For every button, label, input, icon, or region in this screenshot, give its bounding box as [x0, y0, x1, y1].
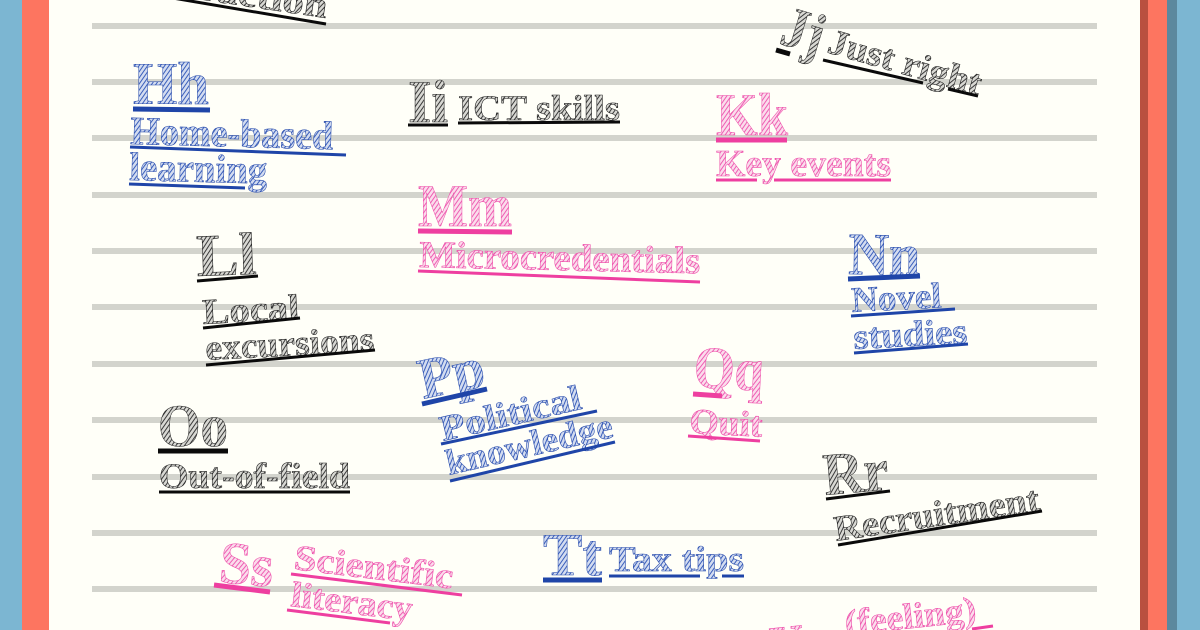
- ruled notebook lines: [92, 23, 1097, 592]
- entry: Kk Key events: [716, 82, 891, 185]
- entry: Nn Novel studies: Novel: [850, 275, 942, 320]
- entry: Ss Scientific literacy: Ss: [217, 529, 276, 600]
- entry: Rr Recruitment: Rr: [820, 437, 891, 508]
- entry: Oo Out-of-field: Out-of-field: [159, 456, 350, 496]
- entry: Oo Out-of-field: [158, 393, 350, 496]
- entry: Tt Tax tips: Tt: [543, 522, 602, 588]
- entry: Pp Political knowledge: Pp: [412, 334, 490, 412]
- entry: Kk Key events: Key events: [716, 143, 891, 185]
- entry: Hh Home-based learning: Home-based: [130, 108, 334, 158]
- entry: Ll Local excursions: [195, 221, 375, 368]
- entry: Hh Home-based learning: Hh: [133, 51, 209, 117]
- entry: Jj Just right: [774, 0, 987, 103]
- entry: Pp Political knowledge: knowledge: [442, 406, 616, 483]
- entry: Qq Quit: [688, 334, 766, 445]
- entry: Pp Political knowledge: [412, 334, 616, 483]
- entry: Rr Recruitment: Recruitment: [831, 479, 1042, 549]
- entry: Oo Out-of-field: Oo: [158, 393, 228, 459]
- entry: Mm Microcredentials: [418, 173, 701, 282]
- entry: Ii ICT skills: Ii: [408, 69, 448, 135]
- entry: Ll Local excursions: Ll: [195, 221, 257, 289]
- entry: cropped word at top: [176, 0, 326, 26]
- entry: Mm Microcredentials: Microcredentials: [419, 234, 701, 282]
- entry: Qq Quit: Qq: [692, 334, 766, 404]
- entry: Nn Novel studies: studies: [852, 311, 968, 357]
- entry: Ll Local excursions: excursions: [204, 319, 375, 368]
- entry: Hh Home-based learning: learning: [129, 144, 268, 193]
- entry: Ii ICT skills: [408, 69, 620, 135]
- entry: Pp Political knowledge: Political: [436, 377, 585, 449]
- entry: Uu (feeling) at bottom edge: [768, 597, 994, 630]
- entry: Jj Just right: Just right: [824, 21, 987, 103]
- entry: Tt Tax tips: Tax tips: [609, 539, 744, 579]
- entry: Ss Scientific literacy: literacy: [289, 574, 415, 629]
- entry: Mm Microcredentials: Mm: [418, 173, 512, 239]
- entry: Ii ICT skills: ICT skills: [458, 88, 620, 128]
- entry: Hh Home-based learning: [129, 51, 346, 193]
- entry: Ll Local excursions: Local: [201, 287, 300, 332]
- entry: Rr Recruitment: [820, 437, 1042, 549]
- entry: Nn Novel studies: [848, 221, 968, 357]
- entry: Tt Tax tips: [543, 522, 744, 588]
- entry: Qq Quit: Quit: [689, 401, 764, 445]
- entry: Kk Key events: Kk: [716, 82, 789, 148]
- entry: Ss Scientific literacy: Scientific: [292, 537, 456, 596]
- entry: Ss Scientific literacy: [214, 544, 462, 627]
- entry: Nn Novel studies: Nn: [848, 221, 921, 288]
